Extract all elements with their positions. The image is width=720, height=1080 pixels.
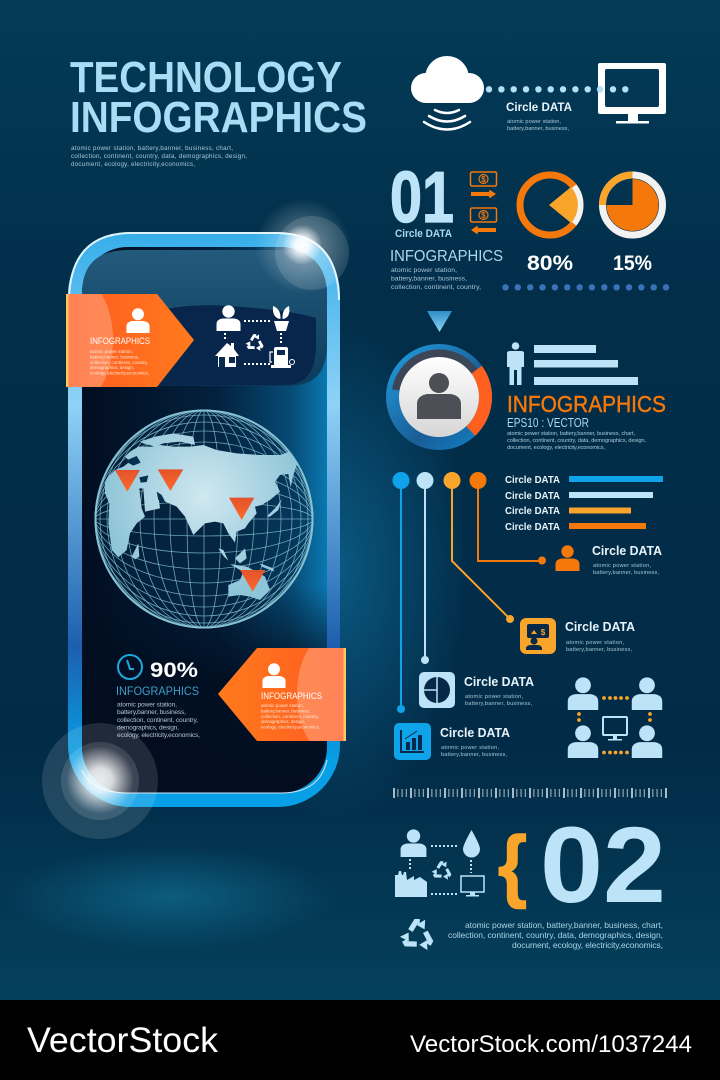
text: battery,banner, business, xyxy=(593,570,659,576)
pie chart 80%: 80% xyxy=(527,252,573,275)
bar row 3: Circle DATA xyxy=(505,505,560,517)
connector dots xyxy=(486,86,628,93)
tag text: battery,banner, business, xyxy=(261,708,310,714)
icon: money out: $ xyxy=(481,175,486,184)
icon: recycle xyxy=(245,334,264,351)
icon: water drop xyxy=(463,830,480,858)
globe xyxy=(95,410,313,628)
stat text xyxy=(117,702,200,739)
tag text: demographics, design, xyxy=(90,365,134,370)
tag gloss xyxy=(66,294,113,387)
icon: pie tile xyxy=(419,672,455,708)
icon: recycle xyxy=(432,862,452,880)
heading: Circle DATA xyxy=(440,725,511,740)
stat text: collection, continent, country, xyxy=(117,717,198,724)
bar row 2 xyxy=(505,490,653,502)
right orange tag xyxy=(218,648,346,741)
tag gloss xyxy=(297,648,346,741)
tag shape xyxy=(218,648,346,741)
icon: standing person xyxy=(507,342,524,385)
globe wireframe xyxy=(95,410,313,628)
item chart icon xyxy=(394,723,511,760)
text: atomic power station, xyxy=(507,119,561,125)
text xyxy=(441,745,507,758)
bar list xyxy=(505,474,663,533)
heading: Circle DATA xyxy=(464,674,535,689)
lens flare bottom xyxy=(42,723,158,839)
icon: person xyxy=(216,305,240,331)
lens flare top xyxy=(255,198,351,294)
left orange tag xyxy=(66,294,194,387)
section 02 text: collection, continent, country, data, demographics, design, xyxy=(448,930,663,940)
person 3 xyxy=(568,725,598,758)
text: battery,banner, business, xyxy=(391,276,467,282)
monitor xyxy=(603,717,627,740)
icon: person xyxy=(556,545,580,571)
tag heading: INFOGRAPHICS xyxy=(261,691,322,701)
title: TECHNOLOGY xyxy=(70,53,342,102)
ruler xyxy=(393,789,667,797)
bars xyxy=(534,345,638,385)
line yellow xyxy=(444,472,514,623)
map markers xyxy=(115,469,265,592)
dial person xyxy=(417,373,461,419)
bar row 1: Circle DATA xyxy=(505,474,560,486)
icon: cloud xyxy=(411,56,484,103)
pie chart 15% xyxy=(602,175,662,275)
section 02 text xyxy=(448,920,663,950)
person 1 xyxy=(568,677,598,710)
item orange person xyxy=(556,543,663,576)
dial disc xyxy=(399,357,479,437)
profile dial xyxy=(386,344,492,450)
clock stat xyxy=(116,655,200,739)
tag text: ecology, electricity,economics, xyxy=(90,370,149,376)
dial orange segment xyxy=(466,366,492,436)
connector dots xyxy=(577,696,652,754)
text xyxy=(593,563,659,576)
line blue xyxy=(392,472,410,713)
bar row 1 xyxy=(505,474,663,486)
tag heading: INFOGRAPHICS xyxy=(90,336,150,346)
title: INFOGRAPHICS xyxy=(70,93,367,142)
footer url: VectorStock.com/1037244 xyxy=(410,1031,692,1058)
dial ring xyxy=(386,344,492,450)
text: atomic power station, xyxy=(593,563,651,569)
footer logo: VectorStock xyxy=(27,1021,219,1060)
icon network in phone xyxy=(215,305,294,368)
text xyxy=(566,640,632,653)
pie chart 15%: 15% xyxy=(613,252,652,275)
tag text: demographics, design, xyxy=(261,719,305,724)
tag text: atomic power station, xyxy=(261,703,304,708)
tag text: collection, continent, country, xyxy=(261,714,319,719)
footer xyxy=(0,1000,720,1080)
icon: monitor xyxy=(598,63,666,124)
icon: factory xyxy=(395,871,427,897)
pointer triangle xyxy=(427,311,452,332)
globe inland seas xyxy=(125,456,166,503)
dial grey arc xyxy=(396,353,474,390)
icon: chart tile xyxy=(394,723,431,760)
stat text: ecology, electricity,economics, xyxy=(117,732,200,739)
section 02 text: atomic power station, battery,banner, business, chart, xyxy=(465,920,663,930)
person 2 xyxy=(632,677,662,710)
subheading: EPS10 : VECTOR xyxy=(507,416,589,430)
title description: collection, continent, country, data, demographics, design, xyxy=(71,153,247,160)
timeline xyxy=(392,472,546,713)
icon: plant xyxy=(273,306,289,331)
text xyxy=(465,694,532,707)
line light blue xyxy=(416,472,434,664)
text: document, ecology, electricity,economics, xyxy=(507,445,605,451)
tag text xyxy=(90,349,149,376)
phone xyxy=(68,232,340,807)
section 02 icons xyxy=(395,829,484,897)
blue dotted divider xyxy=(502,284,669,290)
brace: { xyxy=(498,820,527,909)
main infographics heading: INFOGRAPHICS xyxy=(507,391,666,417)
phone screen xyxy=(82,247,327,793)
person 4 xyxy=(632,725,662,758)
text xyxy=(507,431,646,451)
title description xyxy=(71,145,247,168)
icon: money in: $ xyxy=(481,211,486,220)
text: battery,banner, business, xyxy=(441,752,507,758)
text xyxy=(391,267,481,291)
text: battery,banner, business, xyxy=(566,647,632,653)
title xyxy=(70,53,367,142)
section 01 xyxy=(390,156,503,291)
icon: fuel pump xyxy=(270,347,294,368)
tag person icon xyxy=(126,308,150,333)
bar row 4: Circle DATA xyxy=(505,521,560,533)
tag shape xyxy=(66,294,194,387)
number 02: 02 xyxy=(540,804,666,925)
text: collection, continent, country, xyxy=(391,284,481,291)
cloud to monitor block xyxy=(411,56,666,132)
stat value: 90% xyxy=(150,659,198,682)
caption: Circle DATA xyxy=(395,228,452,240)
globe disc xyxy=(95,410,313,628)
title description: document, ecology, electricity,economics, xyxy=(71,161,195,168)
line orange xyxy=(470,472,546,564)
team network xyxy=(568,677,662,758)
number 01: 01 xyxy=(390,156,454,238)
connector dots xyxy=(410,846,471,894)
icon: monitor xyxy=(461,876,484,896)
icon: person xyxy=(401,829,426,857)
item pie icon xyxy=(419,672,535,708)
stat text: demographics, design, xyxy=(117,724,179,732)
heading: INFOGRAPHICS xyxy=(390,248,503,265)
tag text: collection, continent, country, xyxy=(90,360,148,365)
heading: Circle DATA xyxy=(565,619,636,634)
text xyxy=(507,119,569,132)
item yellow icon xyxy=(520,618,636,654)
stat text: atomic power station, xyxy=(117,702,177,708)
tag text: battery,banner, business, xyxy=(90,354,139,360)
stat text: battery,banner, business, xyxy=(117,709,186,716)
main infographics heading xyxy=(507,391,666,451)
text: collection, continent, country, data, demographics, design, xyxy=(507,438,646,444)
text: atomic power station, xyxy=(566,640,624,646)
icon: speech bubble person: $ xyxy=(541,628,546,637)
phone frame highlight xyxy=(69,233,339,300)
globe land masses xyxy=(105,433,297,600)
tag text xyxy=(261,703,320,730)
standing person with bars xyxy=(507,342,638,385)
pie chart 80% xyxy=(520,175,580,275)
tag person icon xyxy=(262,663,286,688)
icon: house xyxy=(215,343,239,367)
text: battery,banner, business, xyxy=(465,701,532,707)
heading: Circle DATA xyxy=(592,543,663,558)
connector dots xyxy=(225,321,281,364)
title description: atomic power station, battery,banner, business, chart, xyxy=(71,145,233,152)
stat heading: INFOGRAPHICS xyxy=(116,684,199,698)
text: battery,banner, business, xyxy=(507,126,569,132)
icon: signal waves xyxy=(424,110,470,130)
tag text: atomic power station, xyxy=(90,349,133,354)
bar row 3 xyxy=(505,505,631,517)
text: atomic power station, battery,banner, business, chart, xyxy=(507,431,635,437)
tag text: ecology, electricity,economics, xyxy=(261,724,320,730)
text: atomic power station, xyxy=(465,694,523,700)
text: atomic power station, xyxy=(441,745,499,751)
section 02 text: document, ecology, electricity,economics, xyxy=(512,940,663,950)
icon: clock xyxy=(118,655,142,679)
bar row 2: Circle DATA xyxy=(505,490,560,502)
icon: large recycle xyxy=(400,920,435,950)
phone frame xyxy=(68,232,340,807)
bar row 4 xyxy=(505,521,646,533)
heading: Circle DATA xyxy=(506,100,572,114)
text: atomic power station, xyxy=(391,267,457,274)
